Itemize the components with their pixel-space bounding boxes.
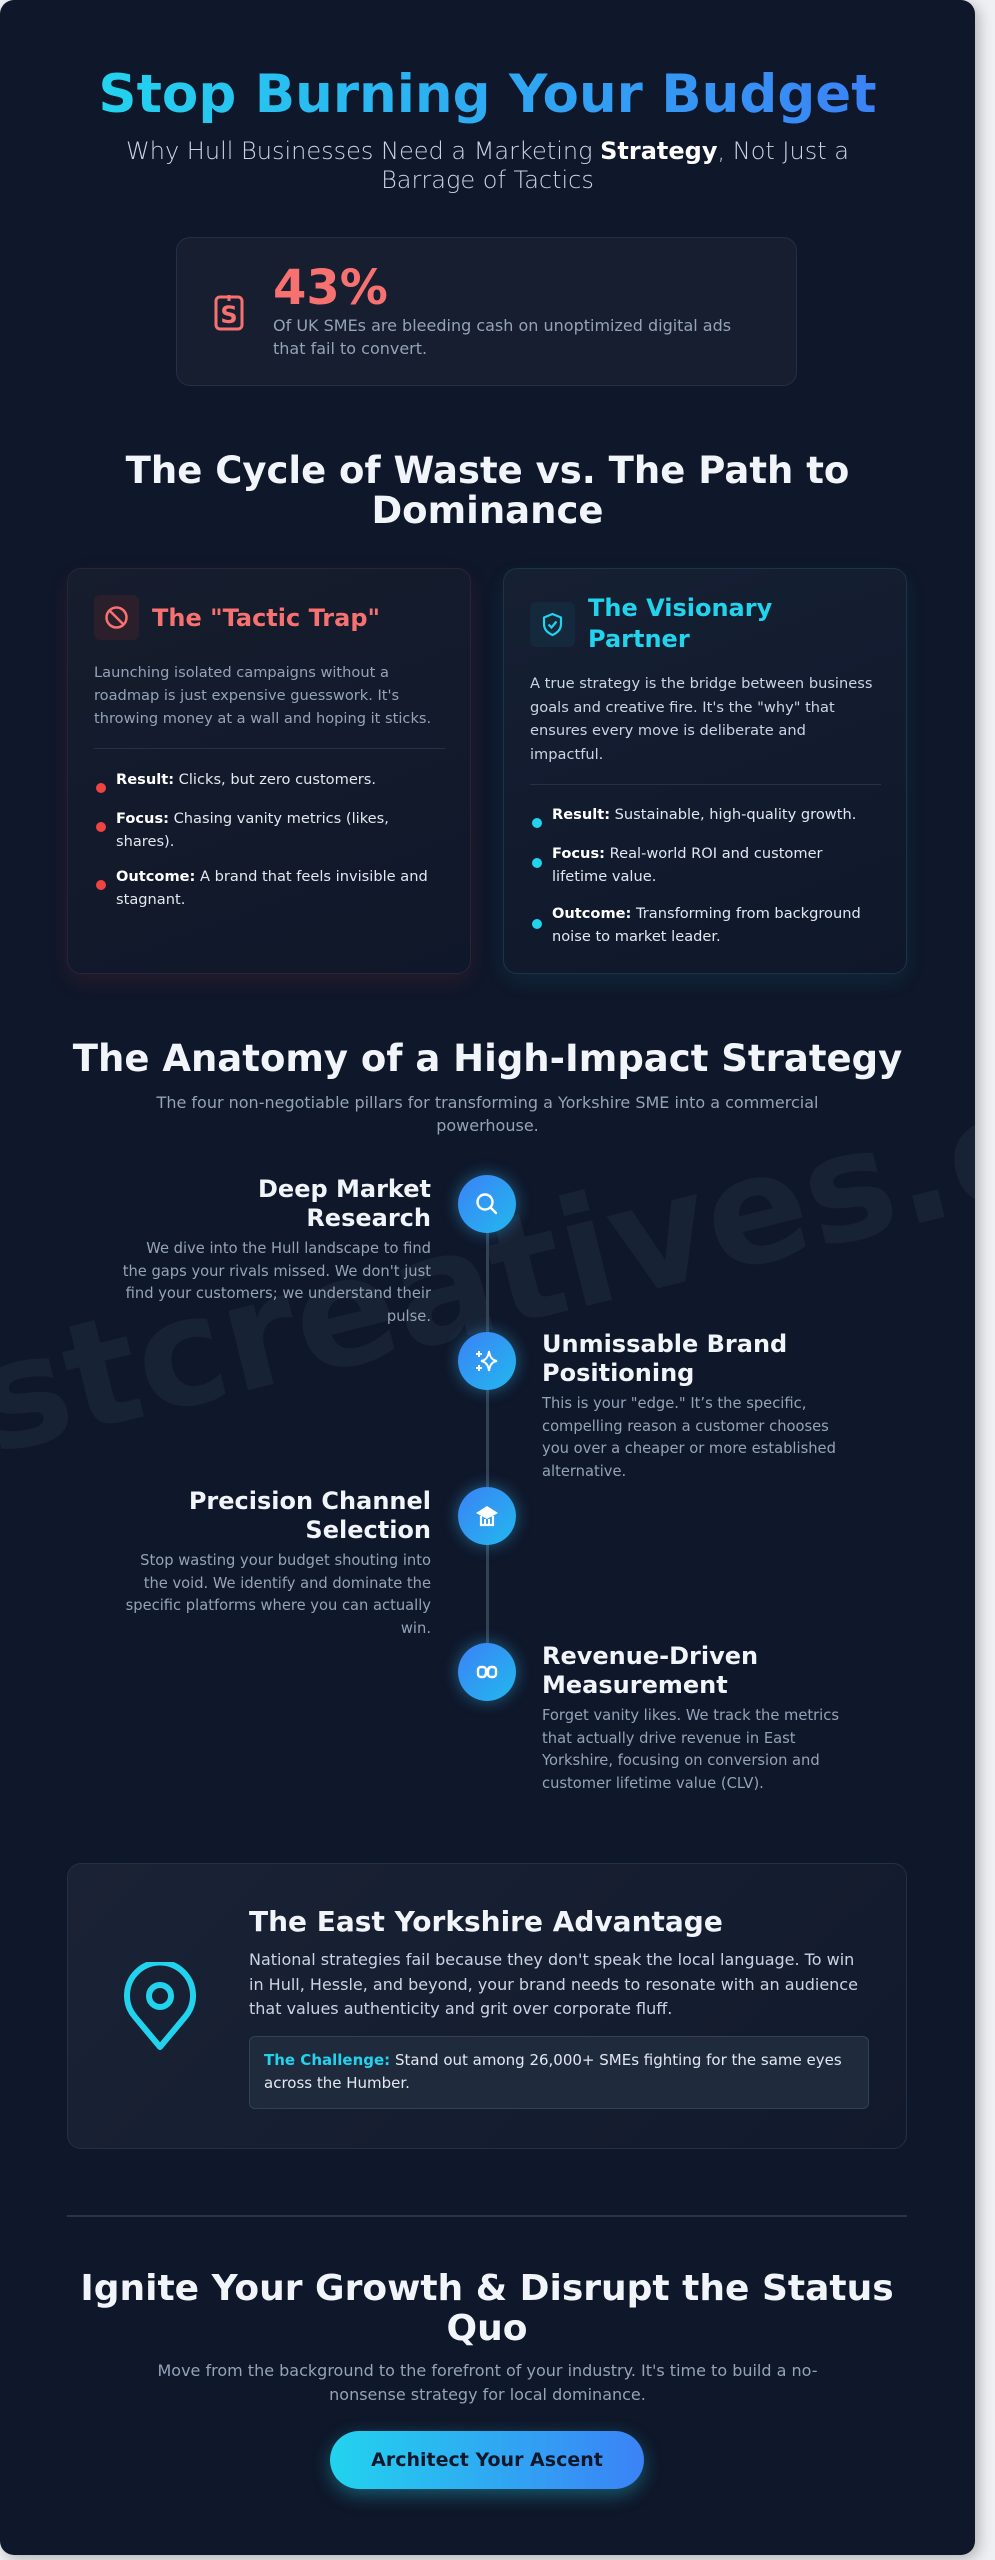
icon: search [458, 1175, 516, 1233]
step 4: measurement: Forget vanity likes. We track the metrics that actually drive revenue in East Yorkshire, focusing on conversion and customer lifetime value (CLV). [542, 1707, 839, 1792]
icon: sparkles [458, 1332, 516, 1390]
step 1: deep market research: find your customers; we understand their [126, 1285, 431, 1302]
bullets: Focus: Chasing vanity metrics (likes, shares). [116, 810, 389, 850]
step 3: channel selection: Selection [305, 1516, 431, 1544]
panel title: The East Yorkshire Advantage [249, 1905, 723, 1938]
button: Architect Your Ascent [371, 2449, 603, 2471]
bullets: Focus: Real-world ROI and customer lifetime value. [552, 845, 823, 885]
subtitle: Why Hull Businesses Need a Marketing Strategy, Not Just a Barrage of Tactics [126, 137, 849, 194]
title: Stop Burning Your Budget [98, 64, 877, 125]
card title: The "Tactic Trap" [152, 604, 380, 632]
step 2: brand positioning: Unmissable Brand [542, 1330, 787, 1358]
step 2: brand positioning: Positioning [542, 1359, 694, 1387]
card text: A true strategy is the bridge between business goals and creative fire. It's the "why" that ensures every move is deliberate and impactful. [530, 675, 872, 762]
icon: megaphone [458, 1487, 516, 1545]
panel: visionary partner [503, 568, 907, 974]
icon: shield [530, 602, 575, 647]
bullets [96, 771, 428, 908]
step 1: deep market research: pulse. [387, 1308, 431, 1325]
heading: cycle of waste: The Cycle of Waste vs. The Path to Dominance [126, 449, 849, 532]
card title: The Visionary [588, 594, 772, 622]
panel text: National strategies fail because they don't speak the local language. To win in Hull, Hessle, and beyond, your brand needs to resonate with an audience that values authenticity and grit over corporate fluff. [249, 1950, 858, 2018]
icon: infinity [458, 1643, 516, 1701]
step 3: channel selection: Stop wasting your budget shouting into the void. We identify and dominate the specific platforms where you can actually win. [126, 1552, 431, 1637]
bullets: Result: Clicks, but zero customers. [116, 771, 376, 788]
step 4: measurement [542, 1642, 839, 1792]
stat number: 43% [273, 260, 388, 316]
step 3: channel selection: Precision Channel [189, 1487, 431, 1515]
step 4: measurement: Revenue-Driven [542, 1642, 758, 1670]
callout: challenge [249, 2036, 869, 2109]
step 4: measurement: Measurement [542, 1671, 728, 1699]
panel: tactic trap [67, 568, 471, 974]
card title [588, 594, 772, 653]
callout: challenge: The Challenge: Stand out among 26,000+ SMEs fighting for the same eyes across the Humber. [264, 2051, 842, 2092]
bullets: Outcome: A brand that feels invisible and stagnant. [116, 868, 428, 908]
bullets: Outcome: Transforming from background noise to market leader. [552, 905, 861, 945]
step 1: deep market research: the gaps your rivals missed. We don't just [123, 1263, 431, 1280]
heading: anatomy: The Anatomy of a High-Impact Strategy [73, 1037, 902, 1080]
anatomy subtitle: The four non-negotiable pillars for transforming a Yorkshire SME into a commercial powerhouse. [157, 1093, 818, 1135]
card title: Partner [588, 625, 690, 653]
bullets: Result: Sustainable, high-quality growth. [552, 806, 856, 823]
stat box [176, 237, 797, 386]
stat text: Of UK SMEs are bleeding cash on unoptimized digital ads that fail to convert. [273, 316, 731, 358]
timeline [123, 1166, 839, 1792]
icon: map pin [124, 1962, 196, 2050]
step 1: deep market research: Research [306, 1204, 431, 1232]
panel: east yorkshire advantage [67, 1863, 907, 2149]
bullets [532, 806, 861, 945]
heading: CTA: Ignite Your Growth & Disrupt the Status Quo [80, 2268, 894, 2349]
step 2: brand positioning: This is your "edge." It’s the specific, compelling reason a customer chooses you over a cheaper or more established alternative. [542, 1395, 836, 1480]
card text: Launching isolated campaigns without a roadmap is just expensive guesswork. It's throwing money at a wall and hoping it sticks. [94, 664, 431, 727]
step 3: channel selection [126, 1487, 431, 1637]
step 1: deep market research [123, 1175, 432, 1325]
step 1: deep market research: Deep Market [258, 1175, 431, 1203]
button [330, 2431, 644, 2489]
CTA text: Move from the background to the forefront of your industry. It's time to build a no-nonsense strategy for local dominance. [157, 2361, 818, 2404]
icon: money bill: S [220, 301, 238, 329]
step 1: deep market research: We dive into the Hull landscape to find [146, 1240, 431, 1257]
icon: money bill [214, 295, 244, 330]
icon: ban [94, 595, 139, 640]
step 2: brand positioning [542, 1330, 836, 1480]
